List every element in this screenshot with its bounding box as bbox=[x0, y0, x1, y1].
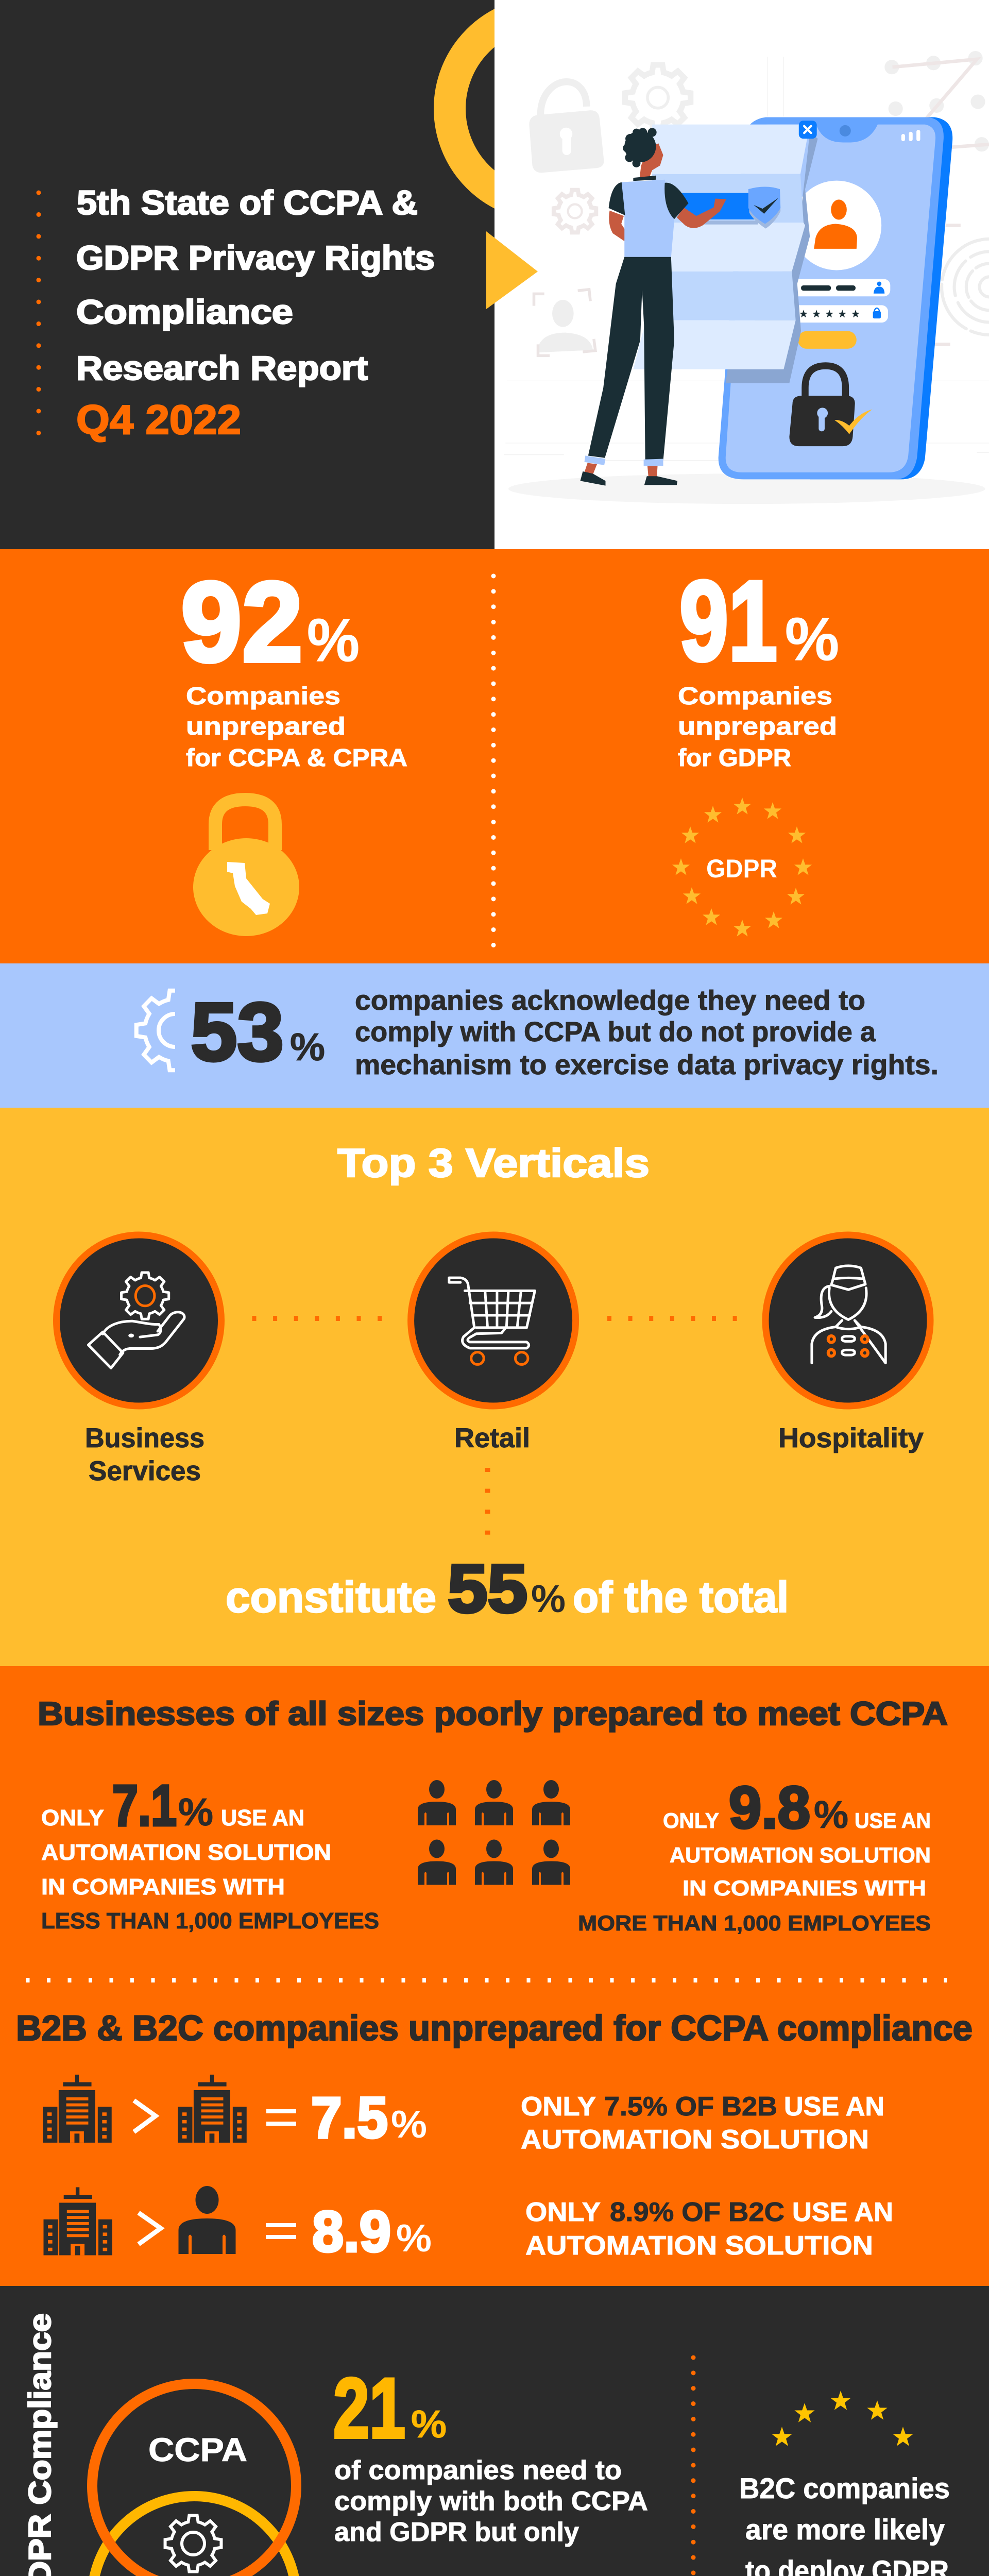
text: need to comply with both: comply with both CCPA bbox=[334, 2486, 648, 2516]
venn diagram bbox=[92, 2384, 296, 2576]
callout: B2C companies: are more likely bbox=[745, 2513, 945, 2546]
phone bbox=[719, 117, 952, 479]
stat: 91% bbox=[678, 557, 839, 772]
stat: 9.8% large companies: % bbox=[814, 1793, 848, 1836]
title: Q4 2022 bbox=[76, 397, 241, 443]
stat: 7.1% small companies: AUTOMATION SOLUTION bbox=[41, 1840, 331, 1865]
text: need to comply with both bbox=[334, 2455, 648, 2547]
title: Research Report bbox=[76, 349, 368, 387]
text: 53% description bbox=[355, 985, 939, 1080]
stat: 9.8% large companies: 9.8 bbox=[729, 1775, 810, 1841]
callout: 55% of the total: % bbox=[531, 1577, 566, 1620]
icon: GDPR stars: GDPR bbox=[706, 854, 777, 883]
text: 53% description: mechanism to exercise data privacy rights. bbox=[355, 1049, 939, 1080]
vertical labels: Retail bbox=[454, 1423, 530, 1453]
stat: 9.8% large companies bbox=[578, 1775, 931, 1935]
stat: 92% bbox=[181, 558, 407, 772]
stat: 21%: 21 bbox=[333, 2361, 405, 2455]
text: need to comply with both: of companies need to bbox=[334, 2455, 622, 2485]
text: B2C automation: ONLY bbox=[525, 2197, 601, 2227]
callout: B2C companies: B2C companies bbox=[739, 2472, 950, 2504]
text: 53% description: companies acknowledge they need to bbox=[355, 985, 865, 1016]
stat: 9.8% large companies: MORE THAN 1,000 EMPLOYEES bbox=[578, 1911, 931, 1935]
equation: B2B 7.5%: % bbox=[391, 2103, 427, 2146]
text: B2B automation: AUTOMATION SOLUTION bbox=[521, 2125, 869, 2155]
title: Compliance bbox=[76, 293, 293, 331]
heading: businesses of all sizes: Businesses of all sizes poorly prepared to meet CCPA bbox=[38, 1695, 948, 1732]
vertical labels: Services bbox=[89, 1456, 201, 1486]
person bbox=[581, 128, 726, 486]
heading: Top 3 Verticals bbox=[337, 1140, 650, 1185]
icon: retail cart bbox=[411, 1235, 576, 1406]
stat: 9.8% large companies: USE AN bbox=[855, 1808, 931, 1833]
stat: 7.1% small companies: % bbox=[178, 1790, 213, 1834]
text: need to comply with both: and GDPR but only bbox=[334, 2517, 579, 2547]
stat: 9.8% large companies: ONLY bbox=[663, 1808, 719, 1833]
callout: 55% of the total: constitute bbox=[226, 1573, 436, 1621]
venn diagram: CCPA bbox=[148, 2431, 247, 2468]
title: GDPR Privacy Rights bbox=[76, 239, 435, 277]
panel: top 3 verticals bbox=[0, 1108, 989, 1666]
stat: 91%: 91 bbox=[679, 557, 777, 684]
panel: CCPA and GDPR compliance bbox=[0, 2286, 989, 2576]
callout: 55% of the total: of the total bbox=[573, 1573, 789, 1621]
stat: 91%: for GDPR bbox=[678, 744, 791, 772]
text: B2C automation: USE AN bbox=[792, 2197, 893, 2227]
stat: 92%: for CCPA & CPRA bbox=[186, 744, 407, 772]
panel: businesses and B2B B2C bbox=[0, 1666, 989, 2286]
title: 5th State of CCPA & bbox=[77, 183, 418, 222]
vertical labels: Business bbox=[85, 1423, 204, 1453]
stat: 92%: % bbox=[307, 606, 360, 674]
yellow ring bbox=[450, 12, 642, 205]
icon: California padlock bbox=[193, 800, 299, 936]
panel: illustration background bbox=[494, 0, 989, 549]
vertical labels bbox=[85, 1423, 924, 1486]
stat: 7.1% small companies: IN COMPANIES WITH bbox=[41, 1874, 285, 1900]
stat: 53%: % bbox=[290, 1025, 325, 1069]
stat: 7.1% small companies bbox=[41, 1773, 379, 1934]
illustration: person with phone and locks bbox=[504, 51, 989, 504]
stat: 53%: 53 bbox=[191, 986, 284, 1078]
document panel bbox=[633, 121, 818, 383]
equation: B2C 8.9% bbox=[43, 2186, 432, 2264]
stat: 9.8% large companies: IN COMPANIES WITH bbox=[683, 1876, 926, 1900]
text: B2B automation: USE AN bbox=[784, 2092, 884, 2122]
text: B2B automation: ONLY bbox=[521, 2092, 596, 2122]
stat: 7.1% small companies: LESS THAN 1,000 EMPLOYEES bbox=[41, 1908, 379, 1934]
equation: B2B 7.5%: 7.5 bbox=[311, 2086, 388, 2150]
equation: B2C 8.9%: % bbox=[396, 2216, 432, 2260]
text: B2C automation: 8.9% OF B2C bbox=[610, 2197, 785, 2227]
yellow triangle arrow bbox=[486, 231, 538, 309]
text: B2C automation: AUTOMATION SOLUTION bbox=[525, 2231, 873, 2261]
callout: 55% of the total bbox=[226, 1551, 789, 1626]
icon: GDPR stars bbox=[672, 798, 812, 937]
icon: people group bbox=[418, 1780, 570, 1885]
stat: 92%: Companies bbox=[186, 683, 340, 710]
icon: half gear bbox=[134, 988, 175, 1073]
stat: 91%: unprepared bbox=[678, 713, 837, 740]
panel: 53% callout bbox=[0, 963, 989, 1108]
panel: unprepared stats bbox=[0, 549, 989, 963]
callout: 55% of the total: 55 bbox=[448, 1551, 527, 1626]
title bbox=[76, 183, 435, 443]
equation: B2C 8.9%: 8.9 bbox=[312, 2199, 391, 2264]
text: 53% description: comply with CCPA but do not provide a bbox=[355, 1016, 876, 1047]
text: B2C automation bbox=[525, 2197, 893, 2261]
dotted accent bbox=[36, 193, 41, 434]
stat: 53% bbox=[191, 986, 325, 1078]
text: B2B automation bbox=[521, 2092, 884, 2155]
icon: business services bbox=[57, 1235, 221, 1406]
stat: 21%: % bbox=[411, 2402, 447, 2446]
stat: 7.1% small companies: USE AN bbox=[221, 1805, 304, 1831]
connector dots bbox=[252, 1318, 737, 1535]
equation: B2B 7.5% bbox=[43, 2075, 427, 2150]
vertical labels: Hospitality bbox=[778, 1423, 924, 1453]
stat: 7.1% small companies: 7.1 bbox=[112, 1773, 177, 1838]
text: B2B automation: 7.5% OF B2B bbox=[604, 2092, 777, 2122]
stat: 91%: % bbox=[785, 605, 839, 673]
stat: 91%: Companies bbox=[678, 683, 832, 710]
icon: hospitality attendant bbox=[765, 1235, 930, 1406]
ground shadow bbox=[508, 473, 985, 504]
icon: gear bbox=[165, 2516, 221, 2571]
stat: 9.8% large companies: AUTOMATION SOLUTION bbox=[670, 1843, 931, 1867]
heading: B2B and B2C: B2B & B2C companies unprepared for CCPA compliance bbox=[16, 2008, 973, 2048]
icon: EU stars bbox=[772, 2391, 918, 2576]
stat: 7.1% small companies: ONLY bbox=[41, 1805, 104, 1831]
callout: B2C companies bbox=[739, 2472, 950, 2576]
panel: header dark bbox=[0, 0, 642, 549]
stat: 92%: unprepared bbox=[186, 713, 346, 740]
stat: 92%: 92 bbox=[181, 558, 303, 685]
